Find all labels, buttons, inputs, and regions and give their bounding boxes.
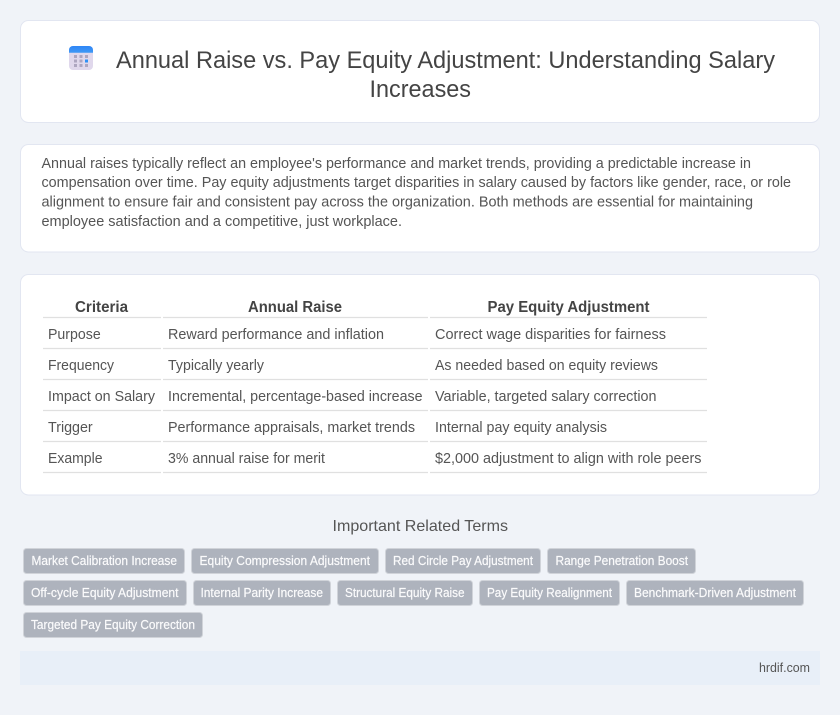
row: trigger: Internal pay equity analysis xyxy=(435,420,607,436)
tag: Benchmark-Driven Adjustment xyxy=(634,586,796,600)
text block: introduction: compensation over time. Pay equity adjustments target disparities in salary caused by factors like gender, race, or role xyxy=(42,175,791,191)
tag: Pay Equity Realignment xyxy=(487,586,612,600)
panel: comparison table xyxy=(20,274,820,495)
tag: Off-cycle Equity Adjustment xyxy=(31,586,179,600)
table header: Criteria xyxy=(75,299,128,316)
row: example xyxy=(48,451,702,467)
tag xyxy=(24,580,186,606)
tag xyxy=(24,548,184,574)
row: impact on salary xyxy=(48,389,656,405)
panel: title header xyxy=(20,20,820,122)
tag: Red Circle Pay Adjustment xyxy=(393,554,533,568)
tag: Targeted Pay Equity Correction xyxy=(31,618,195,632)
row: trigger: Performance appraisals, market trends xyxy=(168,420,415,436)
tag: Market Calibration Increase xyxy=(32,554,177,568)
row: frequency: As needed based on equity reviews xyxy=(435,358,658,374)
row: impact on salary: Incremental, percentage-based increase xyxy=(168,389,422,405)
row: purpose: Purpose xyxy=(48,327,101,343)
tag xyxy=(194,580,330,606)
tag xyxy=(24,612,202,638)
row: frequency: Typically yearly xyxy=(168,358,265,374)
row: frequency: Frequency xyxy=(48,358,115,374)
text block: introduction: employee satisfaction and a competitive, just workplace. xyxy=(42,214,402,230)
row: example: 3% annual raise for merit xyxy=(168,451,325,467)
title: Increases xyxy=(370,76,471,103)
text block: introduction: alignment to ensure fair and consistent pay across the organization. Both methods are essential for maintaining xyxy=(42,195,753,211)
tag: Structural Equity Raise xyxy=(345,586,465,600)
row: purpose: Correct wage disparities for fairness xyxy=(435,327,666,343)
heading: important related terms: Important Related Terms xyxy=(332,518,508,535)
table header: Pay Equity Adjustment xyxy=(488,299,650,316)
text block: introduction: Annual raises typically reflect an employee's performance and market trends, providing a predictable increase in xyxy=(42,156,751,172)
title: Annual Raise vs. Pay Equity Adjustment: Understanding Salary xyxy=(116,47,776,74)
tag xyxy=(338,580,472,606)
tag xyxy=(480,580,620,606)
tag xyxy=(386,548,540,574)
row: frequency xyxy=(48,358,658,374)
icon: calendar xyxy=(69,46,93,70)
row: trigger xyxy=(48,420,607,436)
row: purpose: Reward performance and inflation xyxy=(168,327,384,343)
panel: introduction paragraph xyxy=(20,144,820,252)
row: impact on salary: Impact on Salary xyxy=(48,389,156,405)
row: example: $2,000 adjustment to align with role peers xyxy=(435,451,702,467)
tag: Equity Compression Adjustment xyxy=(200,554,371,568)
row: example: Example xyxy=(48,451,102,467)
tag: Internal Parity Increase xyxy=(200,586,323,600)
footer xyxy=(20,651,820,685)
tag xyxy=(548,548,696,574)
panel: related term tags xyxy=(24,548,804,638)
tag xyxy=(192,548,378,574)
title xyxy=(116,47,776,103)
tag: Range Penetration Boost xyxy=(556,554,688,568)
table header: Annual Raise xyxy=(248,299,342,316)
text block: introduction xyxy=(42,156,791,230)
footer credit: hrdif.com xyxy=(759,660,810,675)
tag xyxy=(626,580,804,606)
table rows xyxy=(43,318,707,472)
row: purpose xyxy=(48,327,666,343)
table header xyxy=(75,299,650,316)
row: trigger: Trigger xyxy=(48,420,93,436)
row: impact on salary: Variable, targeted salary correction xyxy=(435,389,656,405)
